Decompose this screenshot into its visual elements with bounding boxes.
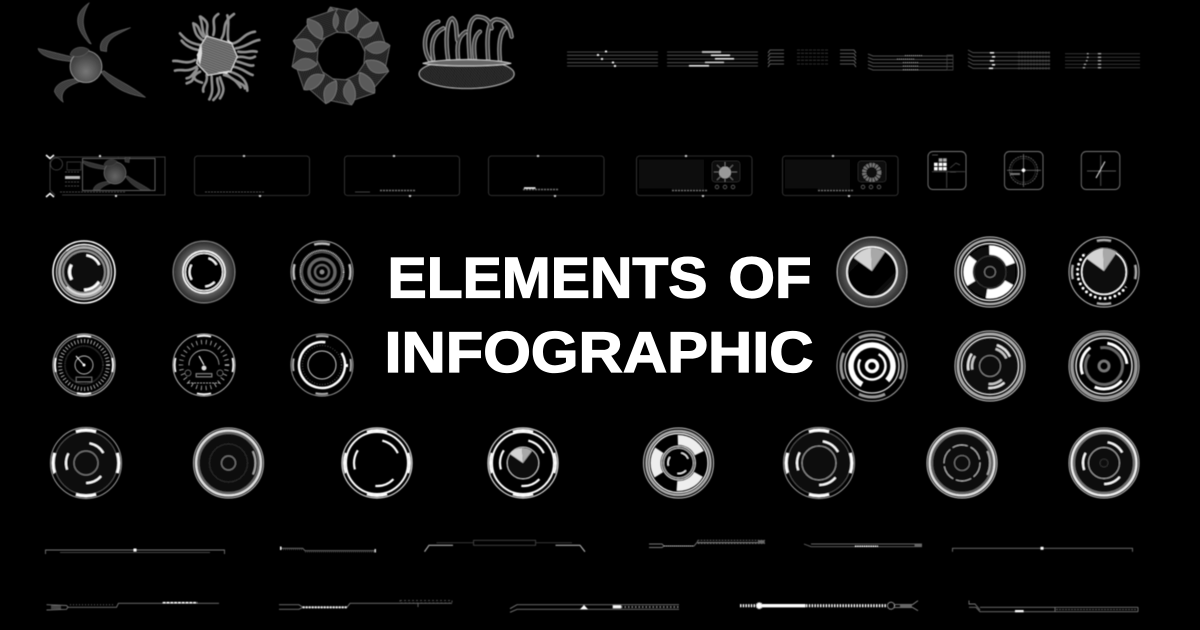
gauge: row 2 speedometer b xyxy=(168,329,240,401)
small widget: block matrix xyxy=(928,152,966,190)
HUD panel 4 xyxy=(488,155,604,197)
bottom rule: lower 1 xyxy=(46,603,219,610)
gauge: row 1 right blocks xyxy=(955,237,1025,307)
gauge: row 3 no. 6 xyxy=(777,421,861,505)
gauge: row 2 right concentric xyxy=(831,325,913,407)
3D object: tentacle ball xyxy=(173,14,259,100)
bottom rule: top 2 xyxy=(280,546,376,552)
arc set xyxy=(45,233,123,311)
bottom rule: lower 2 xyxy=(279,600,452,609)
gauge: row 1 left b xyxy=(173,241,235,303)
bottom rule: top 4 xyxy=(649,540,764,548)
strip 3 xyxy=(768,50,856,67)
bottom rule: top 3 xyxy=(424,540,585,552)
small widget: vector plot xyxy=(1081,152,1120,190)
HUD panel 2 xyxy=(194,155,310,197)
gauge: row 3 no. 4 xyxy=(481,421,565,505)
gauge: row 3 no. 5 xyxy=(644,428,714,498)
gauge: row 3 no. 2 xyxy=(193,427,264,499)
small widget: radar xyxy=(1004,152,1043,190)
3D object: crown disc xyxy=(419,17,514,89)
bottom rule: top 1 xyxy=(46,548,224,554)
HUD panel 1: propeller xyxy=(45,154,166,198)
gauge: row 1 right dots xyxy=(1066,234,1142,310)
3D object: propeller xyxy=(38,3,146,102)
strip 1 xyxy=(567,50,658,67)
data strips: row of line groups xyxy=(567,50,1140,70)
gauge: row 1 left a xyxy=(45,233,123,311)
HUD panel 6: ring xyxy=(782,155,898,197)
icon: chevrons xyxy=(46,155,54,197)
radar wedge xyxy=(510,448,532,463)
title: INFOGRAPHIC xyxy=(384,321,814,385)
gauge: row 1 left c xyxy=(287,237,357,307)
gauge: row 2 right dark rings xyxy=(1069,331,1139,401)
bottom rule: lower 4 xyxy=(740,601,918,611)
strip 4 xyxy=(868,54,953,70)
radar wedge xyxy=(854,248,885,271)
gauge: row 2 right arcs xyxy=(955,331,1025,401)
title: OF xyxy=(728,246,812,310)
title xyxy=(384,246,814,385)
gauge: row 2 ring c xyxy=(288,331,356,399)
HUD panel 3 xyxy=(344,155,460,197)
gauge: row 3 no. 3 xyxy=(335,421,419,505)
3D object: spiked ring xyxy=(288,3,394,109)
radar wedge xyxy=(1086,248,1117,271)
strip 5 xyxy=(968,50,1050,69)
bottom rule: top 5 xyxy=(804,544,922,547)
title: ELEMENTS xyxy=(388,246,708,310)
strip 2 xyxy=(667,51,758,67)
gauge: row 3 no. 1 xyxy=(44,421,128,505)
gauge: row 2 speedometer a xyxy=(49,330,119,400)
strip 6 xyxy=(1065,54,1140,68)
HUD panel 5: tentacle ball xyxy=(636,155,752,197)
bottom rule: lower 3 xyxy=(510,605,679,612)
gauge: row 1 right radar a xyxy=(837,237,907,307)
gauge: row 3 no. 8 xyxy=(1069,428,1139,498)
gauge: row 3 no. 7 xyxy=(925,426,999,500)
bottom rule: top 6 xyxy=(952,547,1132,552)
bottom rule: lower 5 xyxy=(969,600,1138,612)
